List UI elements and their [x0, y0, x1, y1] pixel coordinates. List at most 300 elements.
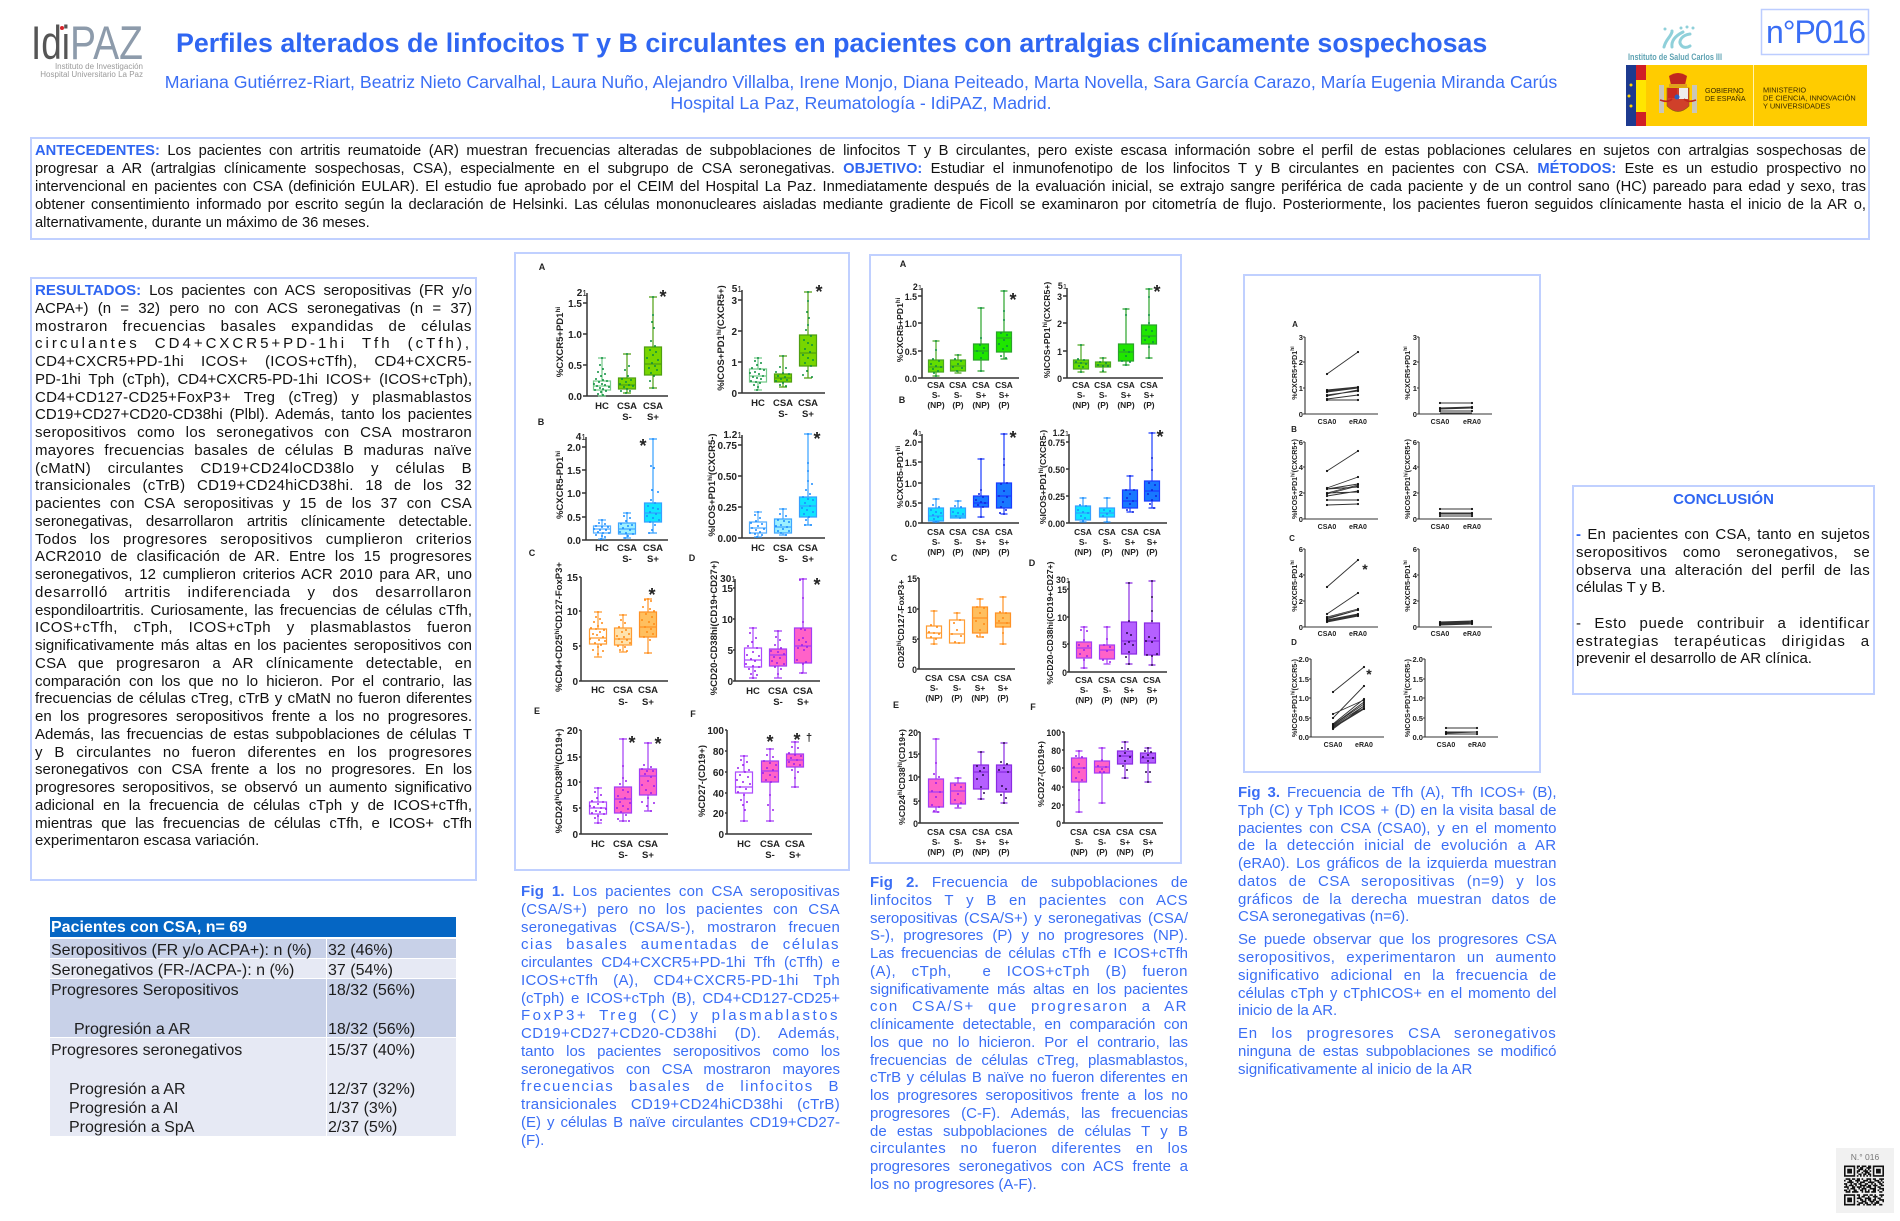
chart: Fig 2B CXCR5-PD1hi: S+: [976, 537, 986, 547]
chart: Fig 1C Treg: 5: [572, 642, 578, 653]
chart: Fig 2A CXCR5+PD1hi: 0.0: [905, 374, 917, 384]
chart: Fig 1E CD24hiCD38hi: 5: [572, 804, 578, 815]
chart: Fig 3A left: hi: [1290, 346, 1296, 351]
chart: Fig 3D right: CSA0: [1437, 742, 1455, 749]
QR code badge: N.° 016: [1851, 1152, 1879, 1162]
chart: Fig 2A ICOS+PD1hi(CXCR5+): S-: [1077, 390, 1085, 400]
chart: Fig 2F CD27-: CSA: [1139, 827, 1157, 837]
chart: Fig 3C left: *: [1362, 561, 1368, 577]
table: pacientes con CSA: Progresores seronegativos: [51, 1042, 242, 1058]
chart: Fig 2A CXCR5+PD1hi: 0.5: [905, 347, 917, 357]
chart: Fig 2B ICOS+PD1hi(CXCR5-): (NP): [1121, 547, 1139, 557]
chart: Fig 3D left: 2.0: [1298, 655, 1309, 664]
caption: figure 1: (F).: [521, 1132, 544, 1148]
chart: Fig 3B left: 0: [1299, 515, 1303, 524]
chart: Fig 1D plasmablastos: 5: [727, 646, 733, 657]
chart: Fig 3D left: CSA0: [1324, 742, 1342, 749]
chart: Fig 1F CD27-: †: [806, 732, 812, 744]
panel: resultados: CD4+CD127-CD25+FoxP3+ Treg (cTreg) y plasmablastos: [35, 388, 472, 406]
chart: Fig 1E CD24hiCD38hi: 15: [567, 753, 578, 764]
chart: Fig 3D left: 0.0: [1298, 733, 1309, 742]
caption: figure 3: Se puede observar que los progresores CSA: [1238, 931, 1556, 948]
chart: Fig 3A left: CSA0: [1318, 419, 1336, 426]
chart: Fig 1A CXCR5+PD1hi: S+: [647, 412, 659, 423]
chart: Fig 2C Treg: CD25: [896, 646, 906, 668]
chart: Fig 2D plasmablastos: S+: [1147, 685, 1157, 695]
chart: Fig 1B ICOS+PD1hi(CXCR5-): CSA: [773, 543, 793, 554]
chart: Fig 1E CD24hiCD38hi: CSA: [638, 839, 658, 850]
chart: Fig 2A ICOS+PD1hi(CXCR5+): (P): [1143, 400, 1155, 410]
panel: resultados: desarrolló artritis indiferenciada y dos desarrollaron: [35, 584, 472, 601]
chart: Fig 1E CD24hiCD38hi: 10: [567, 778, 578, 789]
chart: Fig 2B ICOS+PD1hi(CXCR5-): CSA: [1074, 527, 1092, 537]
logo: IdiPAZ: [31, 16, 143, 79]
chart: Fig 2B CXCR5-PD1hi: 0.0: [905, 519, 917, 529]
chart: Fig 1B ICOS+PD1hi(CXCR5-): S-: [778, 554, 788, 565]
chart: Fig 1A ICOS+PD1hi(CXCR5+): [716, 282, 825, 420]
chart: Fig 1A CXCR5+PD1hi: hi: [555, 307, 562, 313]
chart: Fig 2B ICOS+PD1hi(CXCR5-): 0.75: [1048, 438, 1065, 448]
panel: antecedentes: ANTECEDENTES: Los pacientes con artritis reumatoide (AR) muestran frecuencias alteradas de subpoblaciones de linfocitos T y B circulantes, pero existe escasa información sobre el perfil de estas poblaciones celulares en sujetos con artralgias sospechosas de: [35, 143, 1866, 159]
chart: Fig 3C right: 6: [1413, 545, 1417, 554]
chart: Fig 1E CD24hiCD38hi: 0: [572, 830, 578, 841]
chart: Fig 2E CD24hiCD38hi: CD38: [897, 767, 907, 790]
chart: Fig 1F CD27-: 20: [713, 809, 724, 820]
chart: Fig 2B CXCR5-PD1hi: CSA: [927, 527, 945, 537]
chart: Fig 2A ICOS+PD1hi(CXCR5+): (NP): [1117, 400, 1135, 410]
chart: Fig 2A ICOS+PD1hi(CXCR5+): 1: [1057, 347, 1062, 357]
chart: Fig 2E CD24hiCD38hi: 15: [908, 750, 918, 760]
chart: Fig 3B left: B: [1291, 425, 1297, 434]
chart: Fig 3C right: %CXCR5-PD1: [1403, 565, 1412, 612]
chart: Fig 2B CXCR5-PD1hi: CSA: [995, 527, 1013, 537]
caption: figure 2: Fig 2. Frecuencia de subpoblaciones de: [870, 874, 1188, 891]
chart: Fig 1C Treg: 10: [567, 607, 578, 618]
chart: Fig 3A left: 0: [1299, 410, 1303, 419]
chart: Fig 2D plasmablastos: (P): [1101, 695, 1113, 705]
chart: Fig 3A right: CSA0: [1431, 419, 1449, 426]
chart: Fig 2C Treg: CD127-FoxP3+: [896, 580, 906, 641]
table: pacientes con CSA: 32 (46%): [328, 942, 393, 958]
logo: IdiPAZ: Instituto de Investigación: [55, 62, 143, 71]
chart: Fig 3D left: 1.5: [1298, 675, 1310, 684]
chart: Fig 2E CD24hiCD38hi: 10: [908, 773, 918, 783]
chart: Fig 1A ICOS+PD1hi(CXCR5+): 51: [732, 284, 742, 295]
chart: Fig 2E CD24hiCD38hi: 20: [908, 728, 918, 738]
chart: Fig 2A CXCR5+PD1hi: CSA: [927, 380, 945, 390]
chart: Fig 1F CD27-: %CD27-(CD19+): [697, 745, 708, 817]
chart: Fig 3C left: 4: [1299, 571, 1304, 580]
chart: Fig 2A CXCR5+PD1hi: 1.5: [905, 292, 917, 302]
logo: Gobierno de España: MINISTERIO: [1763, 86, 1806, 94]
caption: figure 3: gráficos de la derecha muestran datos de: [1238, 890, 1556, 908]
chart: Fig 2B ICOS+PD1hi(CXCR5-): CSA: [1121, 527, 1139, 537]
caption: figure 2: los progresores seropositivos frente a los no: [870, 1087, 1188, 1104]
chart: Fig 2F CD27-: S+: [1143, 837, 1153, 847]
conclusion text: [1576, 526, 1870, 667]
chart: Fig 1E CD24hiCD38hi: [534, 706, 668, 861]
caption: figure 2: frecuencias de células cTreg, plasmablastos,: [870, 1052, 1188, 1068]
chart: Fig 2A ICOS+PD1hi(CXCR5+): 3: [1057, 292, 1062, 302]
chart: Fig 1E CD24hiCD38hi: hi: [554, 795, 561, 801]
chart: Fig 1C Treg: %CD4+CD25: [554, 635, 565, 692]
chart: Fig 2A ICOS+PD1hi(CXCR5+): S+: [1121, 390, 1131, 400]
authors and affiliation: Mariana Gutiérrez-Riart, Beatriz Nieto Carvalhal, Laura Nuño, Alejandro Villalba, Irene Monjo, Diana Peiteado, Marta Novella, Sara García Carazo, María Eugenia Miranda Carús: [165, 72, 1557, 92]
chart: Fig 3A left: A: [1292, 320, 1298, 329]
conclusion text: prevenir el desarrollo de AR clínica.: [1576, 650, 1812, 667]
logo: Gobierno de España: [1626, 65, 1867, 126]
panel: resultados: seronegativos, 12 cumplieron criterios ACR 2010 para AR, uno: [35, 566, 472, 583]
chart: Fig 2F CD27-: CSA: [1070, 827, 1088, 837]
chart: Fig 2E CD24hiCD38hi: (NP): [927, 847, 945, 857]
panel: resultados: seronegativas, desarrollaron artritis clínicamente detectable.: [35, 513, 472, 530]
panel: resultados: experimentaron escasa variación.: [35, 832, 259, 849]
chart: Fig 3D left: hi: [1290, 690, 1296, 695]
chart: Fig 2B ICOS+PD1hi(CXCR5-): S-: [1103, 537, 1111, 547]
chart: Fig 2A CXCR5+PD1hi: CSA: [972, 380, 990, 390]
chart: Fig 2C Treg: C: [891, 553, 898, 563]
chart: Fig 1E CD24hiCD38hi: E: [534, 706, 540, 716]
chart: Fig 2B ICOS+PD1hi(CXCR5-): S+: [1147, 537, 1157, 547]
chart: Fig 2B ICOS+PD1hi(CXCR5-): 0.25: [1048, 492, 1065, 502]
panel: resultados: CD19+CD27+CD20-CD38hi (Plbl). Además, tanto los pacientes: [35, 406, 472, 423]
chart: Fig 2E CD24hiCD38hi: S-: [932, 837, 940, 847]
chart: Fig 2B CXCR5-PD1hi: 1.0: [905, 479, 917, 489]
chart: Fig 2C Treg: 10: [907, 605, 917, 615]
chart: Fig 2A ICOS+PD1hi(CXCR5+): CSA: [1094, 380, 1112, 390]
chart: Fig 3C right: 2: [1413, 597, 1417, 606]
chart: Fig 2C Treg: S+: [998, 683, 1008, 693]
caption: figure 2: seropositivas (CSA/S+) y seronegativas (CSA/: [870, 910, 1188, 926]
panel: figure 1 charts: [514, 252, 850, 871]
chart: Fig 2A CXCR5+PD1hi: *: [1009, 290, 1017, 310]
chart: Fig 2B CXCR5-PD1hi: B: [899, 395, 906, 405]
chart: Fig 2B ICOS+PD1hi(CXCR5-): [1038, 427, 1167, 557]
conclusion text: células T y B.: [1576, 579, 1666, 596]
chart: Fig 3B right: 2: [1413, 489, 1417, 498]
logo: Gobierno de España: DE CIENCIA, INNOVACIÓN: [1763, 94, 1856, 102]
panel: resultados: mientras que las frecuencias de células cTfh, e ICOS+ cTfh: [35, 814, 472, 832]
chart: Fig 1C Treg: CSA: [638, 685, 658, 696]
table: pacientes con CSA: Progresión a AR: [69, 1080, 186, 1098]
chart: Fig 1D plasmablastos: S+: [797, 697, 809, 708]
chart: Fig 1A CXCR5+PD1hi: 0.5: [568, 361, 582, 372]
chart: Fig 2A ICOS+PD1hi(CXCR5+): 0: [1057, 374, 1062, 384]
chart: Fig 2C Treg: (P): [951, 693, 963, 703]
chart: Fig 1A CXCR5+PD1hi: CSA: [617, 401, 637, 412]
chart: Fig 2C Treg: 15: [907, 574, 917, 584]
chart: Fig 1D plasmablastos: 15: [722, 584, 733, 595]
chart: Fig 2E CD24hiCD38hi: 0: [913, 819, 918, 829]
chart: Fig 2B CXCR5-PD1hi: hi: [896, 446, 902, 451]
chart: Fig 2B CXCR5-PD1hi: 0.5: [905, 499, 917, 509]
chart: Fig 2B ICOS+PD1hi(CXCR5-): (CXCR5-): [1038, 430, 1048, 468]
chart: Fig 2A CXCR5+PD1hi: (NP): [927, 400, 945, 410]
chart: Fig 3A left: [1290, 320, 1378, 426]
chart: Fig 1E CD24hiCD38hi: hi: [554, 765, 561, 771]
panel: resultados: Además, las frecuencias de estas subpoblaciones de células T: [35, 726, 472, 743]
chart: Fig 2A CXCR5+PD1hi: [895, 259, 1019, 410]
chart: Fig 2E CD24hiCD38hi: 5: [913, 797, 918, 807]
chart: Fig 1B CXCR5-PD1hi: B: [538, 417, 545, 427]
chart: Fig 1B ICOS+PD1hi(CXCR5-): *: [813, 429, 821, 449]
chart: Fig 1B ICOS+PD1hi(CXCR5-): %ICOS+PD1: [707, 481, 718, 537]
chart: Fig 2C Treg: (NP): [925, 693, 943, 703]
panel: antecedentes: alternativamente, durante un máximo de 36 meses.: [35, 215, 370, 231]
chart: Fig 1C Treg: CD127-FoxP3+: [554, 562, 565, 629]
conclusion text: - Esto puede contribuir a identificar: [1576, 615, 1870, 632]
chart: Fig 1B ICOS+PD1hi(CXCR5-): 0.50: [718, 472, 737, 483]
chart: Fig 2A CXCR5+PD1hi: %CXCR5+PD1: [895, 303, 905, 362]
chart: Fig 2F CD27-: (NP): [1070, 847, 1088, 857]
caption: figure 2: circulantes no fueron diferentes en los: [870, 1140, 1188, 1157]
logo: IdiPAZ: Hospital Universitario La Paz: [40, 70, 143, 79]
chart: Fig 2B CXCR5-PD1hi: S+: [999, 537, 1009, 547]
chart: Fig 1D plasmablastos: CSA: [793, 686, 813, 697]
chart: Fig 3B right: hi: [1404, 472, 1410, 477]
chart: Fig 3B right: [1403, 438, 1492, 531]
caption: figure 1: Fig 1. Los pacientes con CSA seropositivas: [521, 883, 840, 900]
chart: Fig 2B CXCR5-PD1hi: (P): [998, 547, 1010, 557]
chart: Fig 3D left: (CXCR5-): [1290, 658, 1299, 690]
chart: Fig 2F CD27-: CSA: [1116, 827, 1134, 837]
caption: figure 3: datos de CSA seropositivas (n=9) y los: [1238, 873, 1556, 890]
panel: resultados: CSA que progresaron a AR clínicamente detectable, en: [35, 655, 472, 672]
chart: Fig 2D plasmablastos: CSA: [1143, 675, 1161, 685]
title: Perfiles alterados de linfocitos T y B circulantes en pacientes con artralgias clínicamente sospechosas: [176, 28, 1487, 58]
chart: Fig 2B ICOS+PD1hi(CXCR5-): CSA: [1143, 527, 1161, 537]
chart: Fig 2A ICOS+PD1hi(CXCR5+): (CXCR5+): [1042, 282, 1052, 322]
chart: Fig 3B left: 2: [1299, 489, 1303, 498]
caption: figure 3: Tph (C) y Tph ICOS + (D) en la visita basal de: [1238, 802, 1556, 819]
chart: Fig 3C left: eRA0: [1349, 631, 1367, 638]
chart: Fig 3C left: 0: [1299, 623, 1303, 632]
chart: Fig 3D right: 1.0: [1412, 694, 1423, 703]
caption: figure 3: CSA seronegativas (n=6).: [1238, 908, 1409, 925]
chart: Fig 2A CXCR5+PD1hi: S-: [954, 390, 962, 400]
panel: resultados: progresores seropositivos, se observó un aumento significativo: [35, 779, 472, 796]
chart: Fig 2E CD24hiCD38hi: CSA: [972, 827, 990, 837]
chart: Fig 1B CXCR5-PD1hi: S+: [647, 554, 659, 565]
chart: Fig 2F CD27-: 40: [1051, 783, 1061, 793]
chart: Fig 2F CD27-: 100: [1046, 728, 1061, 738]
chart: Fig 1C Treg: 0: [572, 677, 578, 688]
chart: Fig 1E CD24hiCD38hi: S+: [642, 850, 654, 861]
chart: Fig 2B CXCR5-PD1hi: S-: [954, 537, 962, 547]
chart: Fig 2E CD24hiCD38hi: (NP): [972, 847, 990, 857]
chart: Fig 2C Treg: (NP): [971, 693, 989, 703]
chart: Fig 2C Treg: [891, 553, 1015, 703]
chart: Fig 1E CD24hiCD38hi: 20: [567, 726, 578, 737]
caption: figure 1: (cTph) e ICOS+cTph (B), CD4+CD127-CD25+: [521, 990, 840, 1006]
chart: Fig 2E CD24hiCD38hi: (P): [998, 847, 1010, 857]
chart: Fig 2B CXCR5-PD1hi: *: [1009, 428, 1017, 448]
chart: Fig 1A ICOS+PD1hi(CXCR5+): *: [815, 282, 823, 302]
chart: Fig 3A right: 0: [1413, 410, 1417, 419]
chart: Fig 2B CXCR5-PD1hi: CSA: [949, 527, 967, 537]
chart: Fig 1E CD24hiCD38hi: CSA: [613, 839, 633, 850]
caption: figure 3: inicio de la AR.: [1238, 1002, 1337, 1019]
chart: Fig 1C Treg: C: [529, 548, 536, 558]
chart: Fig 3D right: [1403, 655, 1498, 749]
caption: figure 2: Las frecuencias de células cTfh e ICOS+cTfh: [870, 945, 1188, 962]
caption: figure 3: significativo adicional en la frecuencia de: [1238, 967, 1556, 984]
panel: antecedentes: progresar a AR (artralgias clínicamente sospechosas, CSA), especialmente en el subgrupo de CSA seronegativas. OBJETIVO: Estudiar el inmunofenotipo de los linfocitos T y B circulantes en pacientes con CSA. MÉTODOS: Este es un estudio prospectivo no: [35, 161, 1866, 177]
chart: Fig 3B right: 4: [1413, 463, 1418, 472]
caption: figure 1: (CSA/S+) pero no los pacientes con CSA: [521, 901, 840, 918]
caption: figure 2: cTrB y células B naïve no fueron diferentes en: [870, 1069, 1188, 1086]
chart: Fig 2B CXCR5-PD1hi: %CXCR5-PD1: [895, 451, 905, 508]
chart: Fig 2D plasmablastos: CSA: [1120, 675, 1138, 685]
panel: resultados: [30, 277, 477, 881]
chart: Fig 1D plasmablastos: 0: [727, 677, 733, 688]
chart: Fig 2A ICOS+PD1hi(CXCR5+): CSA: [1117, 380, 1135, 390]
chart: Fig 1B CXCR5-PD1hi: 1.5: [567, 466, 581, 477]
chart: Fig 1B ICOS+PD1hi(CXCR5-): hi: [707, 475, 714, 481]
caption: figure 1: [521, 883, 840, 1148]
caption: figure 1: frecuencias basales de linfocitos B: [521, 1078, 840, 1095]
chart: Fig 1A CXCR5+PD1hi: [539, 262, 668, 423]
chart: Fig 2E CD24hiCD38hi: hi: [898, 762, 904, 767]
caption: figure 3: de la detección inicial de evolución a AR: [1238, 837, 1556, 854]
chart: Fig 2F CD27-: (P): [1096, 847, 1108, 857]
chart: Fig 1F CD27-: F: [690, 709, 696, 719]
chart: Fig 1B ICOS+PD1hi(CXCR5-): [707, 429, 825, 565]
chart: Fig 2E CD24hiCD38hi: (P): [952, 847, 964, 857]
chart: Fig 1F CD27-: CSA: [785, 839, 805, 850]
chart: Fig 2D plasmablastos: (P): [1146, 695, 1158, 705]
chart: Fig 1F CD27-: 60: [713, 768, 724, 779]
logo: IdiPAZ: PAZ: [70, 16, 143, 69]
chart: Fig 3A left: eRA0: [1349, 419, 1367, 426]
chart: Fig 2A CXCR5+PD1hi: S+: [999, 390, 1009, 400]
table: pacientes con CSA: 15/37 (40%): [328, 1042, 415, 1058]
chart: Fig 2D plasmablastos: [1029, 558, 1167, 705]
chart: Fig 2C Treg: CSA: [971, 673, 989, 683]
chart: Fig 2C Treg: S-: [930, 683, 938, 693]
chart: Fig 1D plasmablastos: *: [813, 575, 821, 595]
panel: resultados: ACR2010 de clasificación de AR. Entre los 15 progresores: [35, 548, 472, 565]
chart: Fig 2F CD27-: [1030, 702, 1163, 857]
table: pacientes con CSA: 18/32 (56%): [328, 982, 415, 999]
chart: Fig 2A CXCR5+PD1hi: S+: [976, 390, 986, 400]
chart: Fig 3B left: eRA0: [1349, 524, 1367, 531]
chart: Fig 2A ICOS+PD1hi(CXCR5+): S+: [1144, 390, 1154, 400]
chart: Fig 2C Treg: 0: [912, 665, 917, 675]
logo: Gobierno de España: DE ESPAÑA: [1705, 94, 1746, 103]
chart: Fig 1A ICOS+PD1hi(CXCR5+): %ICOS+PD1: [716, 335, 727, 391]
caption: figure 1: seronegativos con CSA mostraron mayores: [521, 1060, 840, 1078]
chart: Fig 2E CD24hiCD38hi: CSA: [995, 827, 1013, 837]
chart: Fig 3B right: CSA0: [1431, 524, 1449, 531]
chart: Fig 2D plasmablastos: 301: [1056, 575, 1070, 585]
chart: Fig 2D plasmablastos: D: [1029, 558, 1036, 568]
chart: Fig 3C left: [1289, 534, 1378, 638]
panel: resultados: ICOS+cTfh, cTph, ICOS+cTph y plasmablastos fueron: [35, 619, 472, 636]
chart: Fig 1A CXCR5+PD1hi: %CXCR5+PD1: [555, 313, 566, 377]
chart: Fig 3D left: *: [1366, 666, 1372, 682]
chart: Fig 1E CD24hiCD38hi: *: [628, 733, 636, 753]
table: pacientes con CSA: Progresión a SpA: [69, 1119, 194, 1136]
chart: Fig 1B ICOS+PD1hi(CXCR5-): 1.21: [723, 430, 742, 441]
chart: Fig 3D left: 1.0: [1298, 694, 1309, 703]
chart: Fig 2B CXCR5-PD1hi: CSA: [972, 527, 990, 537]
chart: Fig 2D plasmablastos: S-: [1103, 685, 1111, 695]
panel: resultados: comparación con los que no lo hicieron. Por el contrario, las: [35, 672, 472, 690]
chart: Fig 2F CD27-: %CD27-(CD19+): [1036, 741, 1046, 807]
chart: Fig 2E CD24hiCD38hi: CSA: [927, 827, 945, 837]
chart: Fig 2B ICOS+PD1hi(CXCR5-): %ICOS+PD1: [1038, 473, 1048, 524]
chart: Fig 1F CD27-: 0: [718, 830, 724, 841]
chart: Fig 2B CXCR5-PD1hi: (NP): [927, 547, 945, 557]
chart: Fig 1A CXCR5+PD1hi: 1.0: [568, 330, 582, 341]
chart: Fig 1F CD27-: *: [793, 730, 801, 750]
chart: Fig 3B left: 4: [1299, 463, 1304, 472]
chart: Fig 1A CXCR5+PD1hi: 21: [577, 288, 587, 299]
table: pacientes con CSA: Seronegativos (FR-/ACPA-): n (%): [51, 962, 294, 979]
chart: Fig 3D left: eRA0: [1355, 742, 1373, 749]
chart: Fig 1C Treg: 15: [567, 573, 578, 584]
table: pacientes con CSA: Progresores Seropositivos: [51, 982, 239, 999]
conclusion text: estrategias terapéuticas dirigidas a: [1576, 632, 1870, 650]
panel: resultados: ACPA+) (n = 32) pero no con ACS seronegativas (n = 37): [35, 300, 472, 317]
chart: Fig 1B CXCR5-PD1hi: CSA: [617, 543, 637, 554]
chart: Fig 2A ICOS+PD1hi(CXCR5+): %ICOS+PD1: [1042, 327, 1052, 378]
chart: Fig 1A ICOS+PD1hi(CXCR5+): 3: [731, 296, 737, 307]
panel: resultados: adicional en la frecuencia de células cTph y de ICOS+cTfh,: [35, 797, 472, 814]
chart: Fig 3D right: hi: [1404, 690, 1410, 695]
caption: figure 2: (A), cTph, e ICOS+cTph (B) fueron: [870, 963, 1188, 980]
chart: Fig 2B CXCR5-PD1hi: 1.5: [905, 458, 917, 468]
chart: Fig 2B CXCR5-PD1hi: 2.0: [905, 438, 917, 448]
chart: Fig 1E CD24hiCD38hi: HC: [591, 839, 605, 850]
caption: figure 3: ninguna de estas subpoblaciones se modificó: [1238, 1043, 1556, 1060]
chart: Fig 2F CD27-: CSA: [1093, 827, 1111, 837]
chart: Fig 2A ICOS+PD1hi(CXCR5+): [1042, 281, 1163, 410]
chart: Fig 3A right: eRA0: [1463, 419, 1481, 426]
table: pacientes con CSA: Seropositivos (FR y/o ACPA+): n (%): [51, 942, 312, 958]
chart: Fig 2F CD27-: 60: [1051, 764, 1061, 774]
chart: Fig 1D plasmablastos: 10: [722, 615, 733, 626]
panel: resultados: Todos los progresores seropositivos cumplieron criterios: [35, 530, 472, 548]
chart: Fig 3D left: D: [1291, 638, 1297, 647]
caption: figure 2: los no progresores (A-F).: [870, 1176, 1037, 1193]
chart: Fig 1B CXCR5-PD1hi: HC: [595, 543, 609, 554]
chart: Fig 2C Treg: S-: [953, 683, 961, 693]
chart: Fig 1E CD24hiCD38hi: (CD19+): [554, 729, 565, 765]
chart: Fig 2D plasmablastos: 0: [1062, 668, 1067, 678]
chart: Fig 1D plasmablastos: [689, 553, 821, 708]
chart: Fig 2C Treg: CSA: [994, 673, 1012, 683]
chart: Fig 2C Treg: CSA: [948, 673, 966, 683]
chart: Fig 1A ICOS+PD1hi(CXCR5+): 1: [731, 358, 737, 369]
panel: resultados: en los progresores seropositivos frente a los no progresores.: [35, 708, 472, 725]
chart: Fig 2B ICOS+PD1hi(CXCR5-): (P): [1101, 547, 1113, 557]
chart: Fig 1F CD27-: S+: [789, 850, 801, 861]
chart: Fig 3B left: 6: [1299, 438, 1303, 447]
chart: Fig 2B ICOS+PD1hi(CXCR5-): *: [1156, 427, 1164, 447]
chart: Fig 3B right: (CXCR5+): [1403, 438, 1412, 472]
chart: Fig 2E CD24hiCD38hi: %CD24: [897, 795, 907, 825]
table: pacientes con CSA: 37 (54%): [328, 962, 393, 979]
chart: Fig 1E CD24hiCD38hi: %CD24: [554, 801, 565, 833]
panel: resultados: y B circulantes no fueron diferentes en los progresores: [35, 744, 472, 760]
chart: Fig 3B left: (CXCR5+): [1290, 438, 1299, 472]
chart: Fig 1D plasmablastos: S-: [773, 697, 783, 708]
chart: Fig 2A ICOS+PD1hi(CXCR5+): CSA: [1140, 380, 1158, 390]
panel: resultados: circulantes CD4+CXCR5+PD-1hi Tfh (cTfh),: [35, 335, 472, 352]
caption: figure 1: cias basales aumentadas de células: [521, 936, 840, 953]
